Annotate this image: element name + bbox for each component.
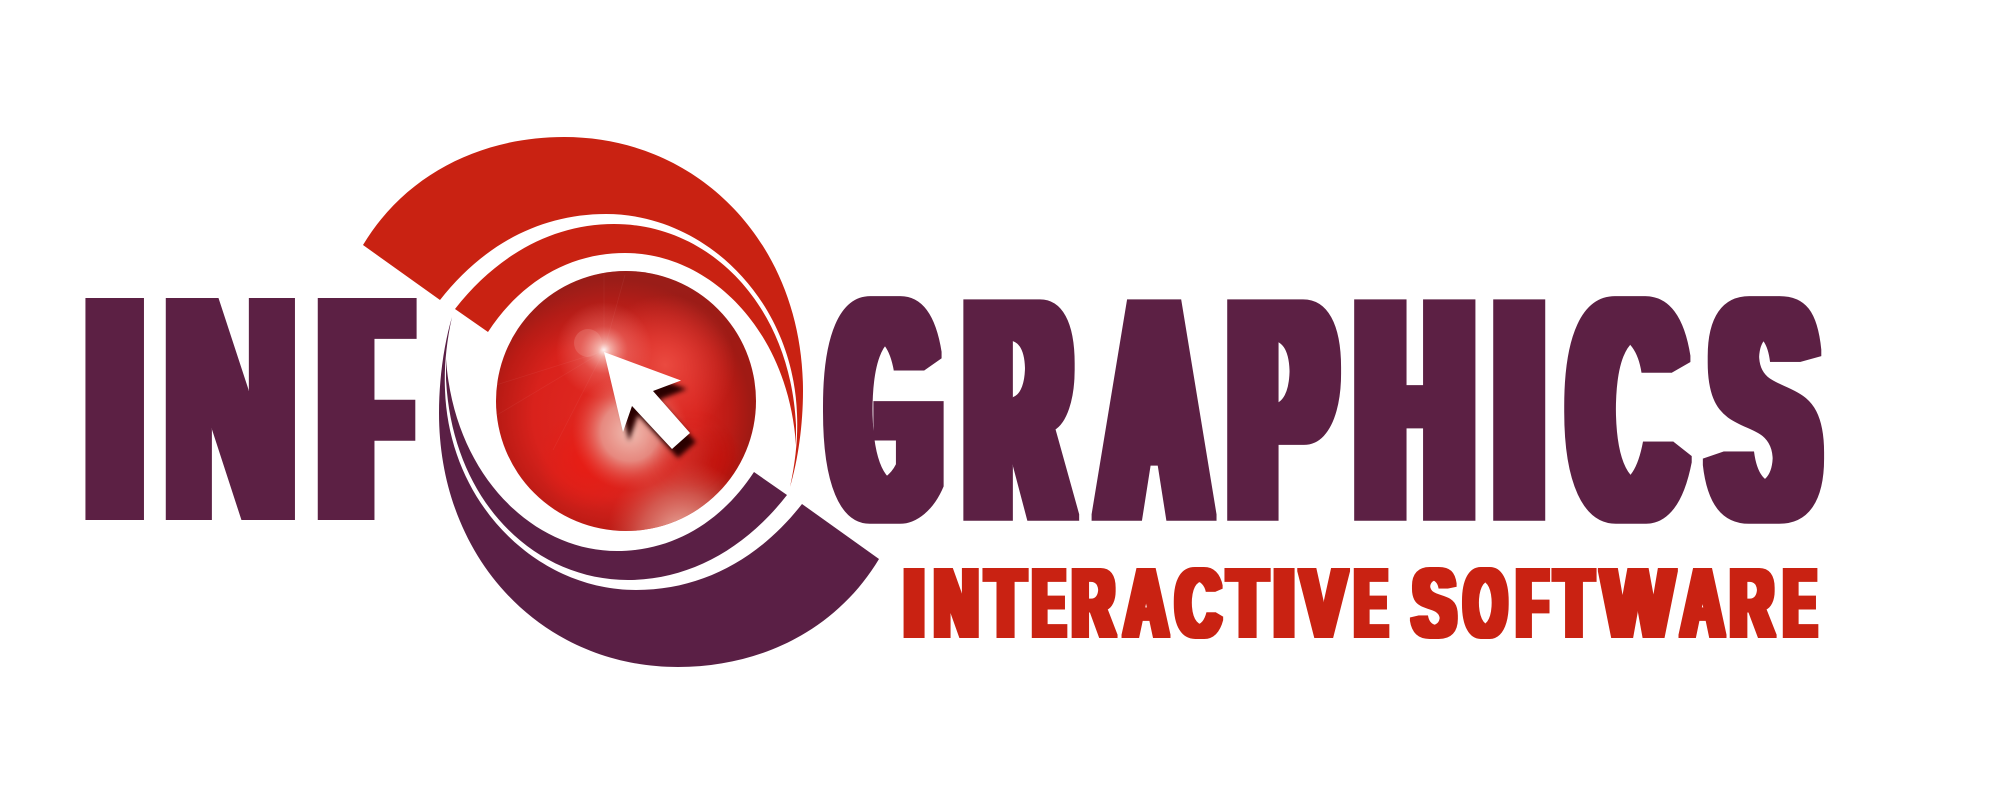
subtitle: INTERACTIVE SOFTWARE: W — [1602, 549, 1674, 658]
heading: GRAPHICS — [832, 236, 1815, 587]
subtitle: INTERACTIVE SOFTWARE: R — [1072, 549, 1114, 658]
heading: INF — [87, 234, 401, 586]
heading: INF: N — [165, 234, 296, 586]
subtitle: INTERACTIVE SOFTWARE: O — [1464, 549, 1507, 658]
icon: purple swoosh bottom — [439, 317, 879, 667]
cursor shadow — [610, 361, 696, 458]
subtitle: INTERACTIVE SOFTWARE: I — [1272, 549, 1296, 658]
subtitle: INTERACTIVE SOFTWARE: F — [1517, 549, 1547, 658]
subtitle: INTERACTIVE SOFTWARE: S — [1412, 549, 1456, 658]
heading: GRAPHICS: S — [1713, 236, 1815, 587]
subtitle: INTERACTIVE SOFTWARE: T — [1555, 549, 1593, 658]
subtitle: INTERACTIVE SOFTWARE: A — [1682, 549, 1724, 658]
heading: GRAPHICS: G — [832, 236, 937, 587]
cursor pointer — [604, 352, 690, 449]
subtitle: INTERACTIVE SOFTWARE: R — [1730, 549, 1773, 658]
logo canvas — [85, 137, 1824, 667]
heading: INF: F — [330, 234, 401, 586]
heading: GRAPHICS: R — [969, 236, 1067, 587]
subtitle: INTERACTIVE SOFTWARE: E — [1033, 549, 1065, 658]
heading: GRAPHICS: P — [1232, 236, 1331, 587]
subtitle: INTERACTIVE SOFTWARE: E — [1784, 549, 1816, 658]
subtitle: INTERACTIVE SOFTWARE: T — [1228, 549, 1267, 658]
heading: GRAPHICS: I — [1498, 236, 1540, 587]
heading: GRAPHICS: A — [1103, 236, 1205, 587]
subtitle: INTERACTIVE SOFTWARE: V — [1301, 549, 1346, 658]
heading: INF: I — [87, 234, 142, 586]
subtitle: INTERACTIVE SOFTWARE: E — [1355, 549, 1387, 658]
icon: red sphere — [496, 271, 756, 531]
heading: GRAPHICS: C — [1573, 236, 1681, 587]
subtitle: INTERACTIVE SOFTWARE: C — [1176, 549, 1220, 658]
heading: GRAPHICS: H — [1359, 236, 1471, 587]
subtitle: INTERACTIVE SOFTWARE: A — [1124, 549, 1168, 658]
subtitle: INTERACTIVE SOFTWARE: I — [902, 549, 926, 658]
subtitle: INTERACTIVE SOFTWARE — [902, 549, 1816, 658]
subtitle: INTERACTIVE SOFTWARE: T — [986, 549, 1025, 658]
icon: cursor arrow — [604, 352, 696, 458]
icon: red swoosh top — [363, 137, 803, 487]
subtitle: INTERACTIVE SOFTWARE: N — [934, 549, 978, 658]
